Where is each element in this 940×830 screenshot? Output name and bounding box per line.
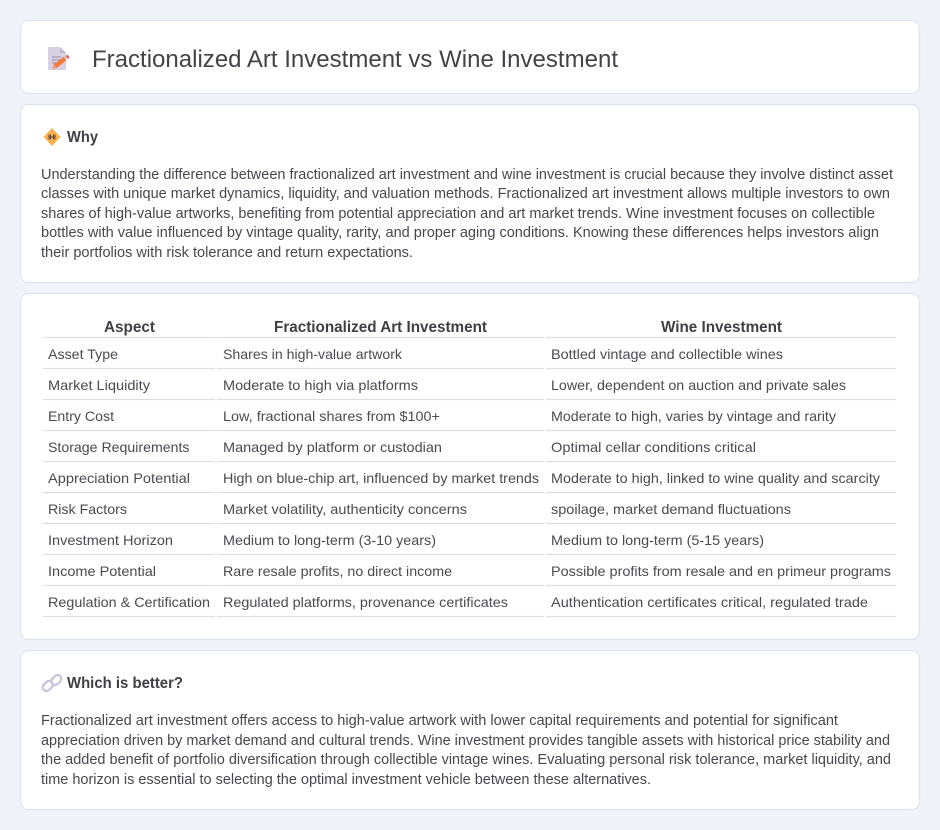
row: entry cost: Low, fractional shares from $100+ bbox=[223, 408, 440, 424]
table header: Aspect bbox=[104, 319, 156, 336]
row: income potential bbox=[48, 563, 891, 579]
row: risk factors: Market volatility, authenticity concerns bbox=[223, 501, 467, 517]
text block: why: classes with unique market dynamics, liquidity, and valuation methods. Fractionalized art investment allows multiple investors to own bbox=[41, 186, 890, 202]
text block: why: shares of high-value artworks, benefiting from potential appreciation and art market trends. Wine investment focuses on collectible bbox=[41, 206, 875, 222]
row: market liquidity bbox=[48, 377, 846, 393]
row: asset type bbox=[48, 346, 783, 362]
row: income potential: Income Potential bbox=[48, 563, 156, 579]
text block: which is better: Fractionalized art investment offers access to high-value artwork with lower capital requirements and potential for significant bbox=[41, 713, 838, 729]
row: investment horizon: Medium to long-term (5-15 years) bbox=[551, 532, 764, 548]
panel: which is better bbox=[20, 650, 920, 810]
row: regulation and certification: Authentication certificates critical, regulated trade bbox=[551, 594, 868, 610]
text block: why: Understanding the difference between fractionalized art investment and wine investment is crucial because they involve distinct asset bbox=[41, 167, 893, 183]
text block: which is better: appreciation driven by market demand and cultural trends. Wine investment provides tangible assets with historical price stability and bbox=[41, 733, 890, 749]
panel: comparison table bbox=[20, 294, 920, 640]
row: regulation and certification bbox=[48, 594, 868, 610]
heading: which is better: Which is better? bbox=[67, 675, 183, 692]
panel: header bbox=[20, 20, 920, 94]
row: income potential: Rare resale profits, no direct income bbox=[223, 563, 452, 579]
row: entry cost: Entry Cost bbox=[48, 408, 114, 424]
row: regulation and certification: Regulation & Certification bbox=[48, 594, 210, 610]
row: appreciation potential bbox=[48, 470, 880, 486]
icon: chain link bbox=[41, 673, 63, 693]
row: appreciation potential: Moderate to high, linked to wine quality and scarcity bbox=[551, 470, 880, 486]
heading: why: Why bbox=[67, 129, 98, 146]
title: Fractionalized Art Investment vs Wine Investment bbox=[92, 46, 618, 73]
row: appreciation potential: High on blue-chip art, influenced by market trends bbox=[223, 470, 539, 486]
row: income potential: Possible profits from resale and en primeur programs bbox=[551, 563, 891, 579]
row: asset type: Shares in high-value artwork bbox=[223, 346, 403, 362]
text block: why bbox=[41, 167, 893, 261]
table header: Wine Investment bbox=[661, 319, 783, 336]
row: risk factors bbox=[48, 501, 791, 517]
row: entry cost bbox=[48, 408, 836, 424]
row: storage requirements bbox=[48, 439, 756, 455]
row: entry cost: Moderate to high, varies by vintage and rarity bbox=[551, 408, 836, 424]
row: investment horizon bbox=[48, 532, 764, 548]
table header bbox=[104, 319, 783, 336]
icon: document with pencil bbox=[48, 47, 70, 70]
text block: which is better bbox=[41, 713, 891, 788]
row: storage requirements: Optimal cellar conditions critical bbox=[551, 439, 756, 455]
row: regulation and certification: Regulated platforms, provenance certificates bbox=[223, 594, 508, 610]
panel: why bbox=[20, 104, 920, 282]
row: appreciation potential: Appreciation Potential bbox=[48, 470, 190, 486]
row: market liquidity: Lower, dependent on auction and private sales bbox=[551, 377, 846, 393]
table header: Fractionalized Art Investment bbox=[274, 319, 488, 336]
row: storage requirements: Storage Requirements bbox=[48, 439, 190, 455]
row: risk factors: Risk Factors bbox=[48, 501, 127, 517]
row: storage requirements: Managed by platform or custodian bbox=[223, 439, 442, 455]
row: investment horizon: Investment Horizon bbox=[48, 532, 173, 548]
icon: warning diamond bbox=[44, 128, 60, 146]
text block: which is better: the added benefit of portfolio diversification through collectible vintage wines. Evaluating personal risk tolerance, market liquidity, and bbox=[41, 752, 891, 768]
row: market liquidity: Market Liquidity bbox=[48, 377, 150, 393]
text block: which is better: time horizon is essential to selecting the optimal investment vehicle between these alternatives. bbox=[41, 772, 651, 788]
row: market liquidity: Moderate to high via platforms bbox=[223, 377, 418, 393]
row: asset type: Bottled vintage and collectible wines bbox=[551, 346, 783, 362]
text block: why: their portfolios with risk tolerance and return expectations. bbox=[41, 245, 413, 261]
text block: why: bottles with value influenced by vintage quality, rarity, and proper aging conditions. Knowing these differences helps investors align bbox=[41, 225, 879, 241]
row: asset type: Asset Type bbox=[48, 346, 118, 362]
row: risk factors: spoilage, market demand fluctuations bbox=[551, 501, 791, 517]
row: investment horizon: Medium to long-term (3-10 years) bbox=[223, 532, 436, 548]
